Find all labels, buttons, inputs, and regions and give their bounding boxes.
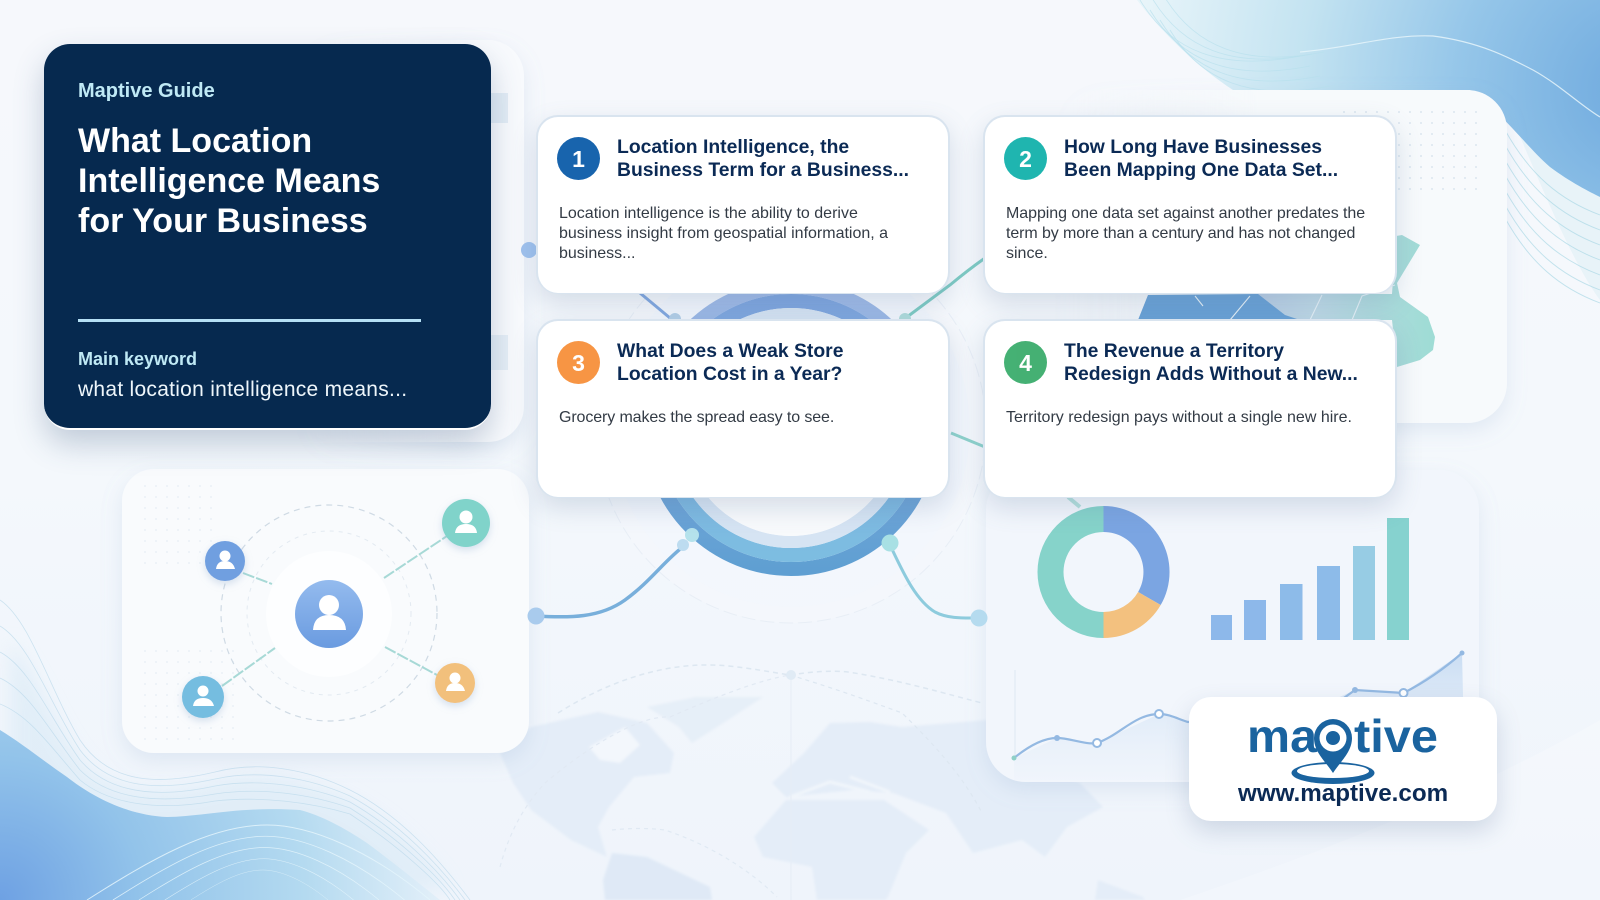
number badge 1 [557,137,600,180]
card 2 body: Mapping one data set against another predates the [1006,205,1365,222]
panel behind hero [300,40,524,442]
logo card [1189,697,1497,821]
website url: www.maptive.com [1237,780,1448,807]
number badge 4: 4 [1019,350,1032,376]
maptive wordmark: tive [1354,710,1438,762]
card 3 body: Grocery makes the spread easy to see. [559,409,834,426]
panel: people network [122,469,529,753]
top-right wave [1137,0,1600,303]
panel: analytics dashboard [986,470,1479,782]
main title: What Location [78,122,312,160]
card 2 body [1006,205,1365,262]
maptive wordmark [1247,710,1438,784]
divider rule [78,319,421,322]
main title: for Your Business [78,202,368,240]
card 4 body: Territory redesign pays without a single new hire. [1006,409,1352,426]
card 3 heading: What Does a Weak Store [617,340,843,362]
bar chart [1211,518,1409,640]
card 1 heading: Business Term for a Business... [617,159,909,181]
card 1 heading [617,136,909,181]
eyebrow label: Maptive Guide [78,80,215,102]
card 1 body: business insight from geospatial information, a [559,225,888,242]
icon: user teal [442,499,490,547]
number badge 4 [1004,341,1047,384]
number badge 3 [557,341,600,384]
icon: user blue [205,541,245,581]
line chart [1012,650,1465,780]
card 2 body: term by more than a century and has not changed [1006,225,1355,242]
card 3 [536,319,950,498]
icon: user orange [435,663,475,703]
card 1 heading: Location Intelligence, the [617,136,849,158]
card 2 heading: How Long Have Businesses [1064,136,1322,158]
keyword label: Main keyword [78,349,197,369]
main title: Intelligence Means [78,162,380,200]
card 2 heading: Been Mapping One Data Set... [1064,159,1338,181]
card 1 [536,115,950,294]
card 2 body: since. [1006,245,1048,262]
card 1 body: business... [559,245,635,262]
icon: central user [295,580,363,648]
faint world map [500,665,1145,900]
main title [78,122,380,240]
card 2 heading [1064,136,1338,181]
number badge 3: 3 [572,350,585,376]
bottom-left wave [0,600,470,900]
card 4 heading: The Revenue a Territory [1064,340,1284,362]
maptive wordmark: ma [1247,710,1317,762]
hub ring with connectors [521,233,1080,626]
card 1 body [559,205,888,262]
card 1 body: Location intelligence is the ability to derive [559,205,858,222]
card 3 heading [617,340,843,385]
panel: hero title card [44,44,491,430]
donut chart [1038,506,1170,638]
card 4 [983,319,1397,498]
card 2 [983,115,1397,294]
number badge 2 [1004,137,1047,180]
keyword value: what location intelligence means... [78,378,407,401]
number badge 1: 1 [572,146,585,172]
card 3 heading: Location Cost in a Year? [617,363,842,385]
card 4 heading [1064,340,1358,385]
map panel [1060,90,1507,423]
icon: user sky [182,676,224,718]
card 4 heading: Redesign Adds Without a New... [1064,363,1358,385]
number badge 2: 2 [1019,146,1032,172]
bottom-right soft wave [1180,720,1600,900]
